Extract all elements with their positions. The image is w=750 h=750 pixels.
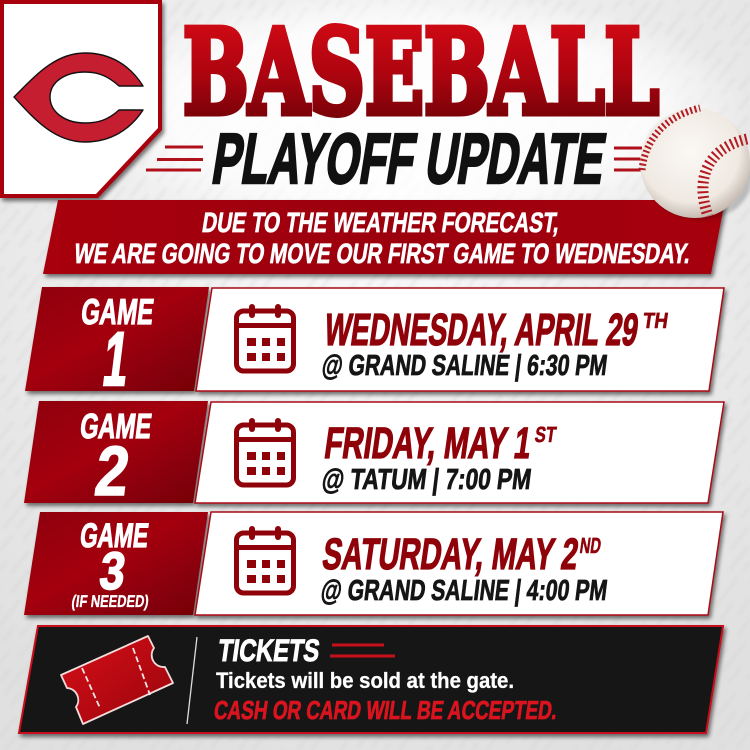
game 3 detail panel xyxy=(195,512,723,615)
text: game 3 date suffix: ND xyxy=(578,533,603,558)
icon: calendar xyxy=(236,418,294,485)
icon: C logo xyxy=(14,53,143,142)
speed lines xyxy=(330,645,395,656)
text: game 3 location: @ GRAND SALINE | 4:00 PM xyxy=(319,575,609,607)
icon: ticket xyxy=(61,636,173,724)
icon: calendar xyxy=(236,526,294,593)
icon: baseball xyxy=(640,108,750,220)
text: game 2 label: GAME xyxy=(78,407,154,446)
text: game 2 location: @ TATUM | 7:00 PM xyxy=(320,464,533,496)
text: game 2 date: FRIDAY, MAY 1 xyxy=(322,419,534,468)
text: game 3 date: SATURDAY, MAY 2 xyxy=(320,530,581,579)
panel: game 2 xyxy=(24,401,724,510)
text: game 1 number: 1 xyxy=(99,317,133,402)
text: payment note: CASH OR CARD WILL BE ACCEPTED. xyxy=(212,695,559,725)
game 2 label panel xyxy=(24,401,208,503)
divider line xyxy=(187,637,197,724)
panel: tickets xyxy=(19,626,723,733)
text: game 1 location: @ GRAND SALINE | 6:30 PM xyxy=(320,350,609,382)
game 1 label panel xyxy=(25,287,209,391)
panel: school logo xyxy=(0,0,162,198)
game 1 detail panel xyxy=(196,288,724,391)
game 2 detail panel xyxy=(195,402,724,503)
text: game 1 label: GAME xyxy=(79,291,156,332)
text: game 3 number: 3 xyxy=(97,542,129,601)
panel: game 3 xyxy=(24,512,723,615)
panel: weather notice banner xyxy=(43,200,725,274)
text: game 2 date suffix: ST xyxy=(533,422,558,447)
icon: calendar xyxy=(236,304,294,371)
panel: game 1 xyxy=(25,287,724,402)
game 3 label panel xyxy=(24,512,208,615)
text: tickets note: Tickets will be sold at the gate. xyxy=(216,668,514,693)
text: game 2 number: 2 xyxy=(91,431,134,510)
text: notice line 1: DUE TO THE WEATHER FORECAST, xyxy=(200,206,562,238)
text: game 3 label: GAME xyxy=(78,517,151,555)
text: if needed: (IF NEEDED) xyxy=(71,592,150,611)
speed lines left of heading xyxy=(146,147,203,170)
speed lines right of heading xyxy=(614,148,642,170)
text: tickets heading: TICKETS xyxy=(216,633,322,668)
text: game 1 date suffix: TH xyxy=(641,308,670,333)
